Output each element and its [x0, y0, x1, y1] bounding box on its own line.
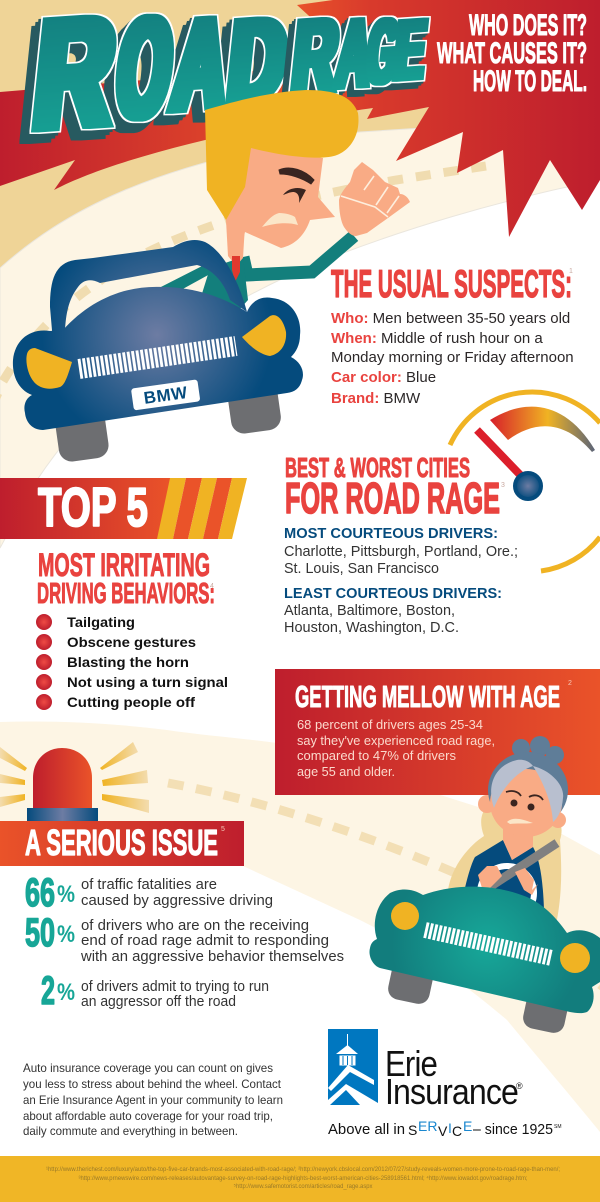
- irritating behaviors heading: MOST IRRITATING: [38, 547, 210, 583]
- usual suspects list: When: Middle of rush hour on a: [331, 330, 543, 347]
- hair back: [488, 752, 568, 828]
- ear: [232, 179, 248, 195]
- grille: [425, 930, 552, 958]
- footnote 1: 1: [569, 268, 573, 275]
- panel: mellow with age: 2: [568, 680, 572, 687]
- steering wheel: [480, 866, 534, 920]
- tagline: – since 1925: [473, 1121, 553, 1138]
- stat: 2 percent: %: [57, 979, 75, 1006]
- eyebrow: [279, 168, 314, 184]
- insurance paragraph: [23, 1061, 283, 1138]
- behaviors list: Blasting the horn: [67, 654, 189, 670]
- knob: [515, 473, 541, 499]
- usual suspects list: [331, 310, 574, 407]
- panel: mellow with age: [275, 669, 600, 795]
- mouth: [262, 213, 298, 227]
- cities text: Atlanta, Baltimore, Boston,: [284, 603, 455, 619]
- base: [27, 808, 98, 821]
- stat: 2 percent: 2: [41, 969, 55, 1013]
- footnote 3: 3: [501, 482, 505, 489]
- behaviors list: Obscene gestures: [67, 634, 196, 650]
- right wheel: [226, 379, 283, 435]
- left headlight: [26, 348, 72, 389]
- registered mark: ®: [516, 1081, 523, 1091]
- seat: [448, 795, 562, 925]
- face: [226, 146, 335, 250]
- footer sources: ³http://www.prnewswire.com/news-releases/autovantage-survey-on-road-rage-highlights-best-worst-american-cities-258918561.html; ⁴http://www.iowadot.gov/roadrage.htm;: [78, 1175, 528, 1182]
- stat: 66 percent: 66: [25, 871, 55, 915]
- panel: mellow with age: age 55 and older.: [297, 764, 395, 779]
- stat: 2 percent: [41, 969, 269, 1013]
- gauge dial band: [490, 407, 595, 452]
- footer sources: ¹http://www.therichest.com/luxury/auto/the-top-five-car-brands-most-associated-with-road-rage/; ²http://newyork.cbslocal.com/2012/07/27/study-reveals-women-more-prone-to-road-rage-than-men/;: [46, 1166, 560, 1173]
- title word: rage: A: [332, 0, 376, 109]
- usual suspects list: Who: Men between 35-50 years old: [331, 310, 570, 327]
- cream road top: [0, 125, 600, 548]
- fist: [339, 162, 410, 236]
- title word: rage: [288, 0, 430, 116]
- logo wordmark: [385, 1043, 518, 1112]
- behaviors list: Not using a turn signal: [67, 674, 228, 690]
- stat: 66 percent: %: [57, 881, 75, 908]
- insurance paragraph: Auto insurance coverage you can count on gives: [23, 1061, 273, 1075]
- license plate: BMW: [143, 383, 189, 408]
- gauge arc lower: [541, 537, 600, 571]
- neck and tie: [226, 220, 245, 282]
- road dashes top: [0, 166, 486, 400]
- dome: [33, 748, 92, 808]
- angry man: [155, 90, 410, 320]
- stat: 2 percent: of drivers admit to trying to run: [81, 979, 269, 995]
- roof: [50, 240, 247, 342]
- stat: 50 percent: with an aggressive behavior themselves: [80, 949, 344, 965]
- cream road lower: [0, 721, 600, 1132]
- granny eyes: [510, 800, 534, 810]
- neck: [503, 828, 533, 860]
- cities heading: BEST & WORST CITIES: [285, 452, 470, 483]
- hair bun: [512, 736, 564, 764]
- cities heading: [285, 452, 500, 523]
- serious issue banner: 5: [221, 826, 225, 833]
- stat: 50 percent: [25, 911, 344, 965]
- blue bmw car: [13, 240, 303, 463]
- tagline: ER: [418, 1118, 437, 1134]
- grille: [79, 346, 236, 369]
- stat: 50 percent: end of road rage admit to responding: [81, 933, 329, 949]
- serious issue banner: A SERIOUS ISSUE: [25, 822, 218, 863]
- insurance paragraph: about affordable auto coverage for your road trip,: [23, 1109, 273, 1123]
- stat: 50 percent: 50: [25, 911, 55, 955]
- usual suspects list: Brand: BMW: [331, 390, 421, 407]
- cities text: [284, 526, 518, 636]
- subtitle questions: [437, 9, 587, 98]
- top 5 band: [0, 476, 247, 539]
- stat: 66 percent: [25, 871, 273, 915]
- tagline: [328, 1118, 562, 1139]
- granny driver: [448, 736, 568, 925]
- stat: 66 percent: of traffic fatalities are: [81, 877, 217, 893]
- needle: [477, 430, 527, 482]
- road dashes lower: [168, 783, 600, 1000]
- ears: [478, 795, 566, 828]
- tagline: E: [463, 1118, 472, 1134]
- footnote 4: 4: [210, 583, 214, 590]
- stat: 50 percent: %: [57, 921, 75, 948]
- stat: 50 percent: of drivers who are on the receiving: [81, 918, 309, 934]
- cities text: St. Louis, San Francisco: [284, 561, 439, 577]
- gauge arc: [450, 392, 600, 445]
- tagline: S: [408, 1122, 417, 1138]
- panel: mellow with age: 68 percent of drivers ages 25-34: [297, 717, 483, 732]
- wheels: [386, 956, 436, 1006]
- eye: [283, 188, 306, 203]
- teal car: [369, 887, 600, 1035]
- title word: rage: E: [391, 3, 430, 98]
- tagline: SM: [554, 1124, 562, 1130]
- left wheel: [54, 407, 110, 463]
- logo mark: [328, 1029, 378, 1105]
- gauge: [450, 392, 600, 571]
- logo wordmark: Erie: [385, 1043, 437, 1084]
- rays: [0, 742, 149, 813]
- panel: mellow with age: compared to 47% of drivers: [297, 748, 456, 763]
- beige road top-left: [0, 0, 432, 268]
- insurance paragraph: you less to stress about behind the wheel. Contact: [23, 1077, 282, 1091]
- license plate: [131, 379, 200, 410]
- title: road rage: [27, 0, 430, 162]
- footer band: [0, 1156, 600, 1202]
- stat: 66 percent: caused by aggressive driving: [81, 893, 273, 909]
- seat belt: [488, 843, 557, 888]
- body: [13, 287, 303, 430]
- serious issue banner: [0, 821, 244, 866]
- cities text: LEAST COURTEOUS DRIVERS:: [284, 586, 502, 602]
- red burst banner: [0, 0, 600, 237]
- top 5 band: TOP 5: [38, 476, 148, 538]
- tagline: V: [438, 1123, 448, 1139]
- hair: [205, 90, 358, 220]
- tagline: I: [448, 1120, 452, 1136]
- irritating behaviors heading: DRIVING BEHAVIORS:: [37, 578, 215, 610]
- alarm light: [0, 742, 149, 821]
- behaviors list: [36, 614, 228, 710]
- cities text: Charlotte, Pittsburgh, Portland, Ore.;: [284, 544, 518, 560]
- tagline: C: [452, 1123, 462, 1139]
- stat: 2 percent: an aggressor off the road: [81, 994, 236, 1010]
- title word: rage: R: [288, 0, 343, 116]
- granny mouth: [507, 819, 533, 824]
- jacket and arm: [155, 236, 354, 320]
- cities text: Houston, Washington, D.C.: [284, 620, 459, 636]
- hands: [478, 866, 538, 895]
- right headlight: [242, 315, 286, 356]
- footer sources: [46, 1166, 560, 1190]
- panel: mellow with age: say they've experienced road rage,: [297, 733, 495, 748]
- behaviors list: Cutting people off: [67, 694, 195, 710]
- footer sources: ⁵http://www.safemotorist.com/articles/road_rage.aspx: [234, 1183, 373, 1190]
- headlights: [391, 902, 419, 930]
- usual suspects list: Monday morning or Friday afternoon: [331, 349, 574, 366]
- erie insurance logo: [328, 1029, 562, 1139]
- body: [369, 887, 600, 1013]
- hair front: [491, 760, 563, 822]
- body: [465, 840, 544, 910]
- face: [490, 769, 562, 837]
- granny brows: [506, 791, 543, 800]
- logo wordmark: Insurance: [385, 1071, 518, 1112]
- irritating behaviors heading: [37, 547, 215, 610]
- cities text: MOST COURTEOUS DRIVERS:: [284, 526, 498, 542]
- insurance paragraph: daily commute and everything in between.: [23, 1124, 238, 1138]
- title word: rage: G: [363, 0, 403, 103]
- behaviors list: Tailgating: [67, 614, 135, 630]
- tagline: Above all in: [328, 1121, 405, 1138]
- title word: road: [27, 0, 292, 162]
- insurance paragraph: an Erie Insurance Agent in your community to learn: [23, 1093, 283, 1107]
- usual suspects list: Car color: Blue: [331, 369, 436, 386]
